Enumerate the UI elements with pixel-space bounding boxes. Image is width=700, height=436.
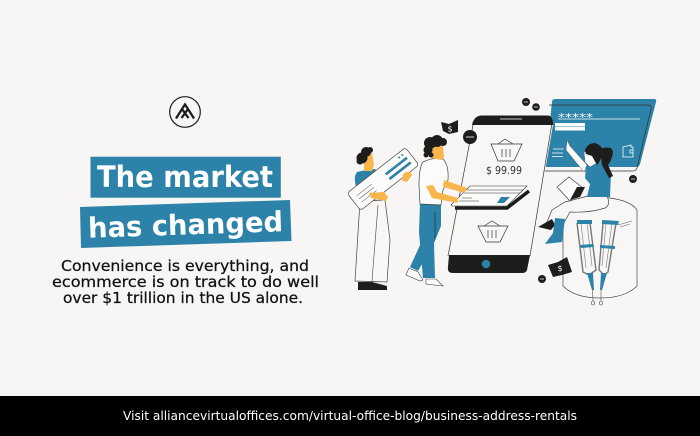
cylinder seat — [563, 197, 637, 305]
crutch left — [577, 220, 596, 305]
hands — [369, 192, 388, 201]
phone bottom bar — [448, 255, 530, 273]
icon: wallet — [623, 145, 633, 157]
text block: description: Convenience is everything, and — [61, 257, 309, 275]
icon: basket bottom — [478, 221, 508, 242]
heading: The market: The market — [97, 160, 273, 194]
heading: has changed: has changed — [88, 205, 284, 245]
text block: description: ecommerce is on track to do well — [52, 273, 319, 291]
neck and face — [364, 153, 374, 171]
hair — [356, 147, 373, 164]
hair — [585, 143, 613, 178]
text block: description: over $1 trillion in the US alone. — [63, 289, 303, 307]
shirt — [419, 158, 448, 205]
trousers — [419, 203, 441, 278]
raised arm — [566, 140, 587, 172]
footer bar — [0, 396, 700, 436]
icon: dollar bill top — [441, 120, 458, 134]
laptop — [557, 177, 583, 201]
trousers — [547, 196, 609, 226]
dark shoe — [538, 219, 555, 230]
icon: dollar bill bottom — [548, 257, 572, 277]
icon: dollar bill top: $ — [447, 124, 453, 134]
card — [347, 148, 419, 210]
person: left, holding card — [347, 147, 419, 290]
arms — [426, 180, 467, 203]
face — [431, 146, 444, 160]
phone — [447, 116, 553, 273]
small dark discs — [522, 98, 637, 283]
trousers — [355, 200, 390, 282]
shoes — [358, 282, 387, 290]
panel: credit card screen — [545, 99, 656, 171]
hair — [424, 135, 447, 158]
card password stars: ***** — [558, 111, 594, 124]
payment card on phone — [451, 186, 529, 208]
icon: company logo — [170, 97, 200, 127]
shoes — [406, 268, 423, 281]
face — [584, 150, 597, 167]
person: centre, using phone — [406, 135, 467, 286]
person: right, seated — [538, 140, 613, 244]
torso — [585, 165, 611, 197]
back leg — [410, 243, 430, 271]
blue sock — [545, 218, 565, 244]
crutch right — [599, 220, 619, 305]
icon: basket top — [491, 139, 522, 161]
price: $ 99.99 — [486, 164, 522, 177]
phone top bar — [472, 116, 553, 125]
text block: description — [52, 257, 319, 307]
icon: minus disc — [463, 130, 477, 144]
footer bar: Visit alliancevirtualoffices.com/virtual-office-blog/business-address-rentals — [123, 408, 577, 423]
icon: dollar bill bottom: $ — [557, 264, 563, 273]
torso — [355, 169, 382, 200]
